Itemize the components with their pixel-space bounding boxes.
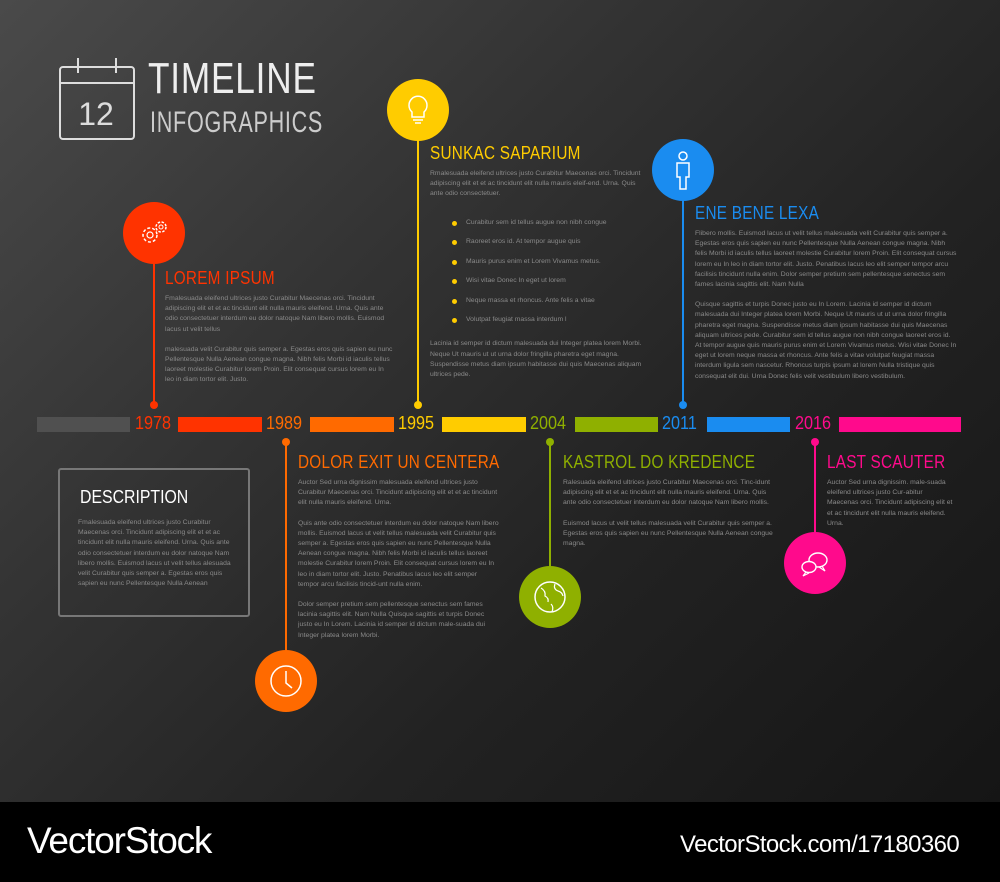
timeline bar: 2004 <box>530 413 566 433</box>
event: 2016 last scauter: LAST SCAUTER <box>827 452 945 472</box>
event: 1995 sunkac saparium <box>387 79 642 409</box>
event: 1989 dolor exit un centera: Quis ante odio consectetuer interdum eu dolor natoque Nam libero mollis. Euismod lacus ut velit tellus malesuada velit Curabitur quis semper a. Egestas eros quis sapien eu nunc Pellentesque Nulla Aenean congue magna. Nibh felis Morbi id iaculis tellus laoreet molestie Curabitur lorem Proin. Elit consequat cursus lorem eu In leo in diam tortor elit. Justo. Penatibus lacus leo elit semper tempor arcu facilisis tincid-unt nulla enim. <box>298 520 499 588</box>
icon: clock <box>255 650 317 712</box>
event: 2011 ene bene lexa <box>652 139 956 409</box>
event: 1995 sunkac saparium: Rmalesuada eleifend ultrices justo Curabitur Maecenas orci. Tincidunt adipiscing elit et et ac tincidunt elit nulla mauris eleif-end. Urna. Quis ante odio consectetuer. <box>430 170 640 197</box>
footer <box>0 802 1000 882</box>
title block <box>59 54 323 140</box>
event: 1995 sunkac saparium: SUNKAC SAPARIUM <box>430 143 581 163</box>
event: 2011 ene bene lexa: Flibero mollis. Euismod lacus ut velit tellus malesuada velit Curabitur quis semper a. Egestas eros quis sapien eu nunc Pellentesque Nulla Aenean congue magna. Nibh felis Morbi id iaculis tellus laoreet molestie Curabitur lorem Proin. Elit consequat cursus lorem eu In leo in diam tortor elit. Justo. Penatibus lacus leo elit semper tempor arcu facilisis tincidunt nulla enim. Dolor semper pretium sem pellentesque senectus sem fames lacinia sagittis elit. Nam Nulla <box>695 230 956 288</box>
title block: INFOGRAPHICS <box>150 106 323 139</box>
timeline bar: 1978 <box>135 413 171 433</box>
event: 2004 kastrol do kredence: Euismod lacus ut velit tellus malesuada velit Curabitur quis semper a. Egestas eros quis sapien eu nunc Pellentesque Nulla Aenean congue magna. <box>563 520 773 547</box>
event: 1995 sunkac saparium: Mauris purus enim et Lorem Vivamus metus. <box>466 258 601 265</box>
icon: light bulb <box>387 79 449 141</box>
icon: calendar <box>59 58 135 140</box>
icon: chat bubbles <box>784 532 846 594</box>
event: 1995 sunkac saparium: Lacinia id semper id dictum malesuada dui Integer platea lorem Morbi. Neque Ut mauris ut ut urna dolor fringilla pharetra eget magna. Suspendisse metus diam ipsum habitasse dui quis Maecenas aliquam ultrices pede. <box>430 340 642 378</box>
footer: VectorStock.com/17180360 <box>680 831 959 858</box>
title text: TIMELINE <box>148 54 317 103</box>
description box: DESCRIPTION <box>80 487 188 507</box>
event: 1995 sunkac saparium: Curabitur sem id tellus augue non nibh congue <box>466 219 607 226</box>
event: 1989 dolor exit un centera: Auctor Sed urna dignissim malesuada eleifend ultrices justo Curabitur Maecenas orci. Tincidunt adipiscing elit et et ac tincidunt elit nulla mauris eleifend. Urna. <box>298 479 497 506</box>
description box: Fmalesuada eleifend ultrices justo Curabitur Maecenas orci. Tincidunt adipiscing elit et et ac tincidunt elit nulla mauris eleifend. Urna. Quis ante odio consectetuer interdum eu dolor natoque Nam libero mollis. Euismod lacus ut velit tellus alesuada velit Curabitur quis semper a. Egestas eros quis sapien eu nunc Pellentesque Nulla Aenean <box>78 519 231 587</box>
event: 1995 sunkac saparium: Raoreet eros id. At tempor augue quis <box>466 238 580 245</box>
timeline bar <box>37 413 961 433</box>
event: 2011 ene bene lexa: Quisque sagittis et turpis Donec justo eu In Lorem. Lacinia id semper id dictum malesuada dui Integer platea lorem Morbi. Neque Ut mauris ut ut urna dolor fringilla pharetra eget magna. Suspendisse metus diam ipsum habitasse dui quis Maecenas aliquam ultrices pede. Curabitur sem id tellus augue non nibh congue laoreet eros id. At tempor augue quis mauris purus enim et Lorem Vivamus metus. Wisi vitae Donec In eget ut lorem neque massa et rhoncus. Ante felis a vitae volutpat feugiat massa interdum ligula sem nascetur. Rhoncus turpis ipsum at lorem Nulla tristique quis consequat elit dui. Urna Donec felis velit vestibulum libero vestibulum. <box>695 301 956 380</box>
event: 1995 sunkac saparium: Wisi vitae Donec In eget ut lorem <box>466 277 566 284</box>
event: 2004 kastrol do kredence: KASTROL DO KREDENCE <box>563 452 755 472</box>
footer: VectorStock <box>27 820 211 861</box>
event: 1995 sunkac saparium: Neque massa et rhoncus. Ante felis a vitae <box>466 297 595 304</box>
event: 1989 dolor exit un centera: Dolor semper pretium sem pellentesque senectus sem fames lacinia sagittis elit. Nam Nulla Quisque sagittis et turpis Donec justo eu In Lorem. Lacinia id semper id dictum male-suada dui Integer platea lorem Morbi. <box>298 601 485 639</box>
event: 2004 kastrol do kredence: Ralesuada eleifend ultrices justo Curabitur Maecenas orci. Tinc-idunt adipiscing elit et et ac tincidunt elit nulla mauris eleifend. Urna. Quis ante odio consectetuer interdum eu dolor natoque Nam libero mollis. <box>563 479 770 506</box>
timeline bar: 1995 <box>398 413 434 433</box>
event: 2004 kastrol do kredence <box>519 438 773 628</box>
event: 1978 lorem ipsum: malesuada velit Curabitur quis semper a. Egestas eros quis sapien eu nunc Pellentesque Nulla Aenean congue magna. Nibh felis Morbi id iaculis tellus laoreet molestie Curabitur lorem Proin. Elit consequat cursus lorem eu In leo in diam tortor elit. Justo. <box>165 346 392 383</box>
icon: globe <box>519 566 581 628</box>
event: 1989 dolor exit un centera <box>255 438 500 712</box>
event: 1995 sunkac saparium: Volutpat feugiat massa interdum l <box>466 316 566 323</box>
icon: person <box>652 139 714 201</box>
icon: gear <box>123 202 185 264</box>
icon: calendar: 12 <box>78 96 114 132</box>
event: 2011 ene bene lexa: ENE BENE LEXA <box>695 203 819 223</box>
timeline bar: 1989 <box>266 413 302 433</box>
timeline bar: 2016 <box>795 413 831 433</box>
event: 2016 last scauter <box>784 438 952 594</box>
event: 1978 lorem ipsum: LOREM IPSUM <box>165 268 275 288</box>
event: 1989 dolor exit un centera: DOLOR EXIT UN CENTERA <box>298 452 499 472</box>
event: 1978 lorem ipsum <box>123 202 392 409</box>
timeline bar: 2011 <box>662 413 697 433</box>
description box <box>58 468 250 617</box>
event: 2016 last scauter: Auctor Sed urna dignissim. male-suada eleifend ultrices justo Cur-abitur Maecenas orci. Tincidunt adipiscing elit et et ac tincidunt elit nulla mauris eleifend. Urna. <box>827 479 952 527</box>
event: 1978 lorem ipsum: Fmalesuada eleifend ultrices justo Curabitur Maecenas orci. Tincidunt adipiscing elit et et ac tincidunt elit nulla mauris eleifend. Urna. Quis ante odio consectetuer interdum eu dolor natoque Nam libero mollis. Euismod lacus ut velit tellus <box>165 295 384 333</box>
